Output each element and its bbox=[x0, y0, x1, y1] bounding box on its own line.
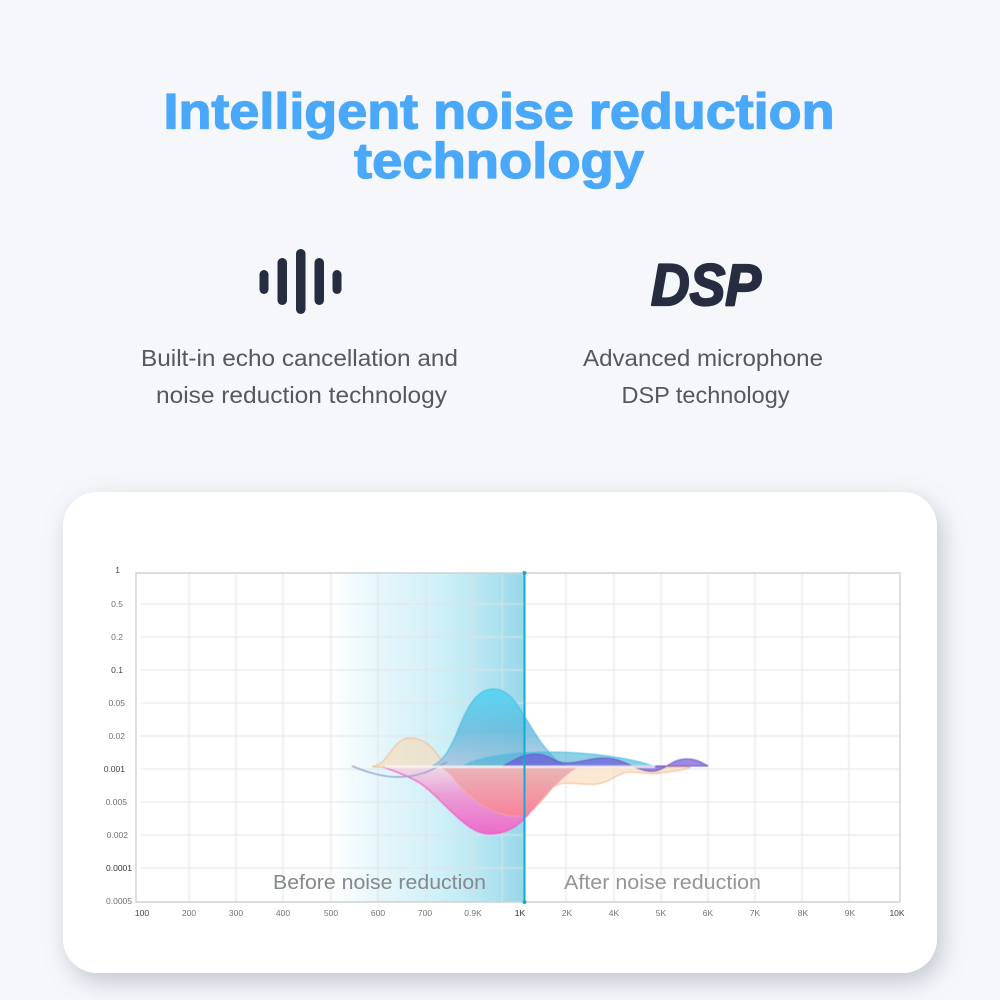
x-axis labels: 400 bbox=[276, 908, 290, 918]
baseline highlight bbox=[385, 766, 655, 768]
wave: blue-grey line bbox=[352, 762, 447, 777]
wave: coral overlap bbox=[441, 767, 577, 816]
waveform chart bbox=[352, 689, 708, 834]
x-axis labels: 500 bbox=[324, 908, 338, 918]
x-axis labels: 10K bbox=[889, 908, 905, 918]
x-axis labels: 4K bbox=[609, 908, 620, 918]
wave: purple ripple bbox=[503, 754, 708, 771]
text: echo cancellation description: Built-in echo cancellation and bbox=[141, 345, 458, 371]
text: DSP description: Advanced microphone bbox=[583, 345, 823, 371]
y-axis labels: 0.02 bbox=[108, 731, 125, 741]
x-axis labels: 7K bbox=[750, 908, 761, 918]
label: before noise reduction: Before noise reduction bbox=[273, 871, 486, 894]
y-axis labels bbox=[104, 565, 132, 906]
y-axis labels: 0.5 bbox=[111, 599, 123, 609]
y-axis labels: 0.002 bbox=[107, 830, 128, 840]
x-axis labels: 8K bbox=[798, 908, 809, 918]
x-axis labels bbox=[135, 908, 905, 918]
x-axis labels: 300 bbox=[229, 908, 243, 918]
noise reduction band bbox=[331, 573, 524, 902]
label: after noise reduction: After noise reduction bbox=[564, 871, 761, 894]
x-axis labels: 600 bbox=[371, 908, 385, 918]
y-axis labels: 0.0005 bbox=[106, 896, 132, 906]
x-axis labels: 0.9K bbox=[464, 908, 482, 918]
x-axis labels: 5K bbox=[656, 908, 667, 918]
y-axis labels: 0.005 bbox=[106, 797, 127, 807]
x-axis labels: 9K bbox=[845, 908, 856, 918]
title: Intelligent noise reduction bbox=[164, 84, 834, 140]
wave: cyan peak bbox=[432, 689, 566, 766]
1K divider line bbox=[522, 571, 526, 904]
y-axis labels: 0.2 bbox=[111, 632, 123, 642]
icon: DSP logo: DSP bbox=[651, 253, 761, 318]
chart frame bbox=[136, 573, 900, 902]
y-axis labels: 0.05 bbox=[108, 698, 125, 708]
y-axis labels: 1 bbox=[115, 565, 120, 575]
text: DSP description: DSP technology bbox=[622, 382, 790, 408]
y-axis labels: 0.0001 bbox=[106, 863, 132, 873]
text: DSP description bbox=[583, 345, 823, 408]
wave: peach before and after bbox=[373, 738, 691, 816]
title: technology bbox=[354, 133, 644, 189]
wave: wide cyan hump bbox=[463, 752, 653, 766]
text: echo cancellation description bbox=[141, 345, 458, 408]
x-axis labels: 1K bbox=[515, 908, 526, 918]
icon: sound wave bbox=[260, 249, 342, 314]
x-axis labels: 700 bbox=[418, 908, 432, 918]
y-axis labels: 0.001 bbox=[104, 764, 125, 774]
text: echo cancellation description: noise reduction technology bbox=[156, 382, 448, 408]
y-axis labels: 0.1 bbox=[111, 665, 123, 675]
wave: pink trough bbox=[383, 767, 577, 834]
x-axis labels: 6K bbox=[703, 908, 714, 918]
x-axis labels: 2K bbox=[562, 908, 573, 918]
x-axis labels: 100 bbox=[135, 908, 149, 918]
panel: chart card bbox=[63, 492, 937, 973]
x-axis labels: 200 bbox=[182, 908, 196, 918]
title bbox=[164, 84, 834, 189]
